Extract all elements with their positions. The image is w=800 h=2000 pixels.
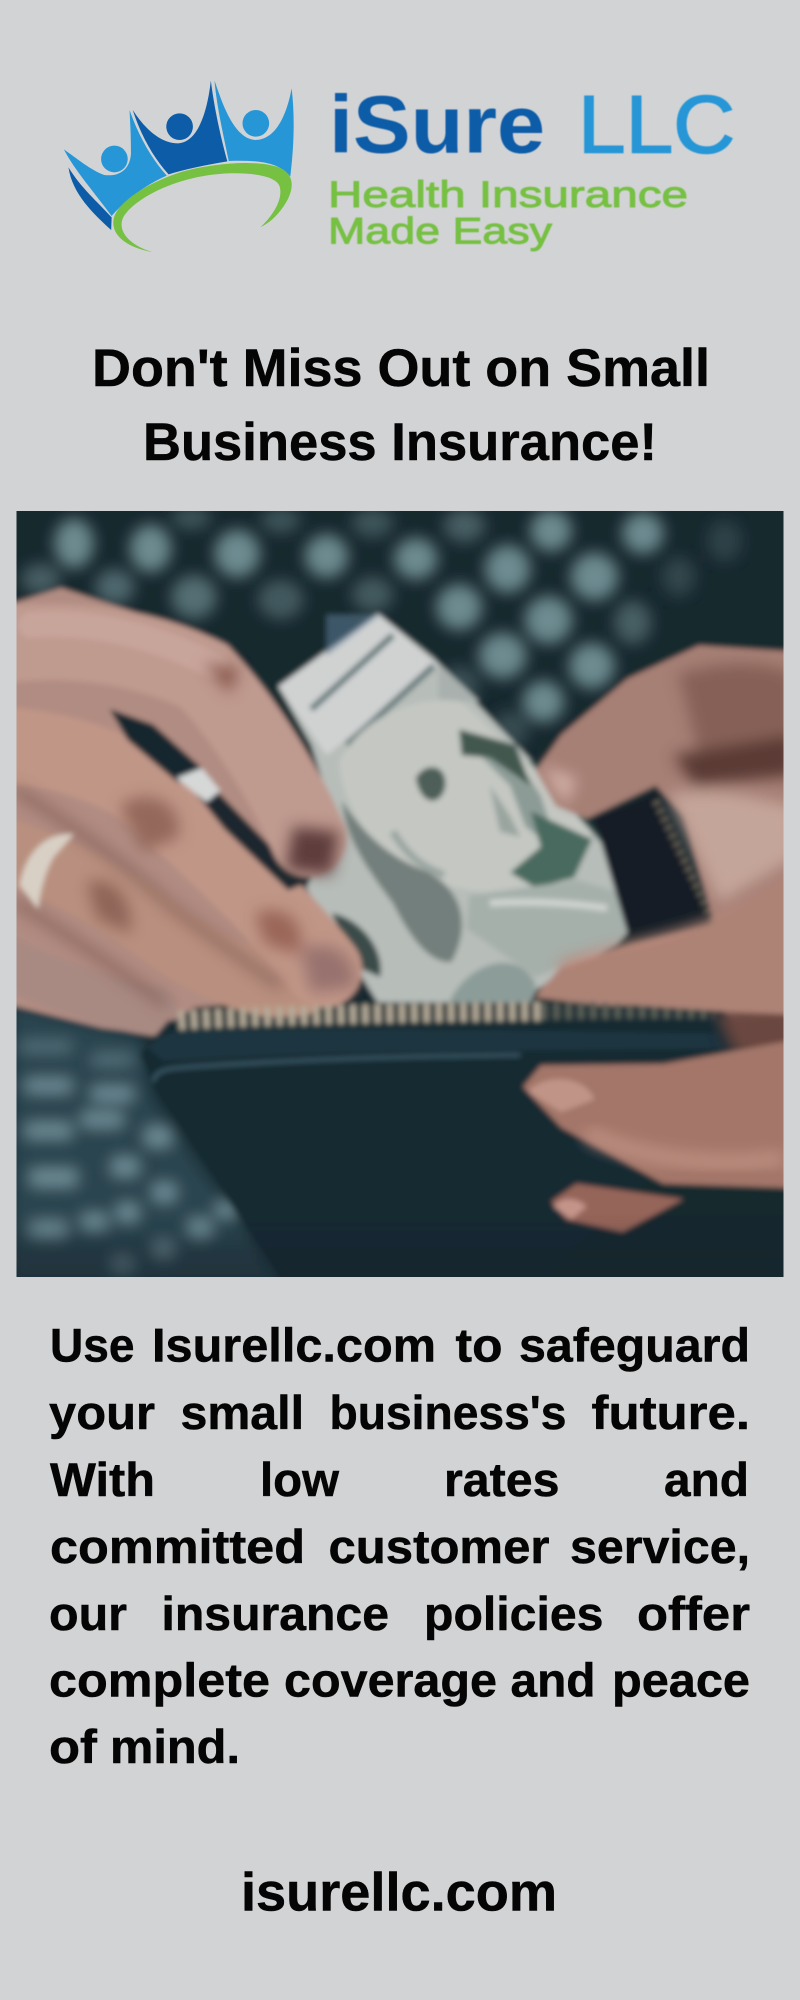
text block: body copy: low: [260, 1453, 339, 1506]
text block: body copy: our: [49, 1587, 127, 1640]
text block: body copy: service,: [570, 1520, 750, 1573]
polka dot fabric: [21, 507, 742, 748]
zipper: [179, 1011, 541, 1020]
text block: body copy: safeguard: [519, 1319, 750, 1372]
text block: body copy: peace: [612, 1654, 750, 1707]
text block: body copy: future.: [592, 1386, 750, 1439]
logo tagline: Made Easy: [328, 210, 553, 252]
wallet: [141, 998, 738, 1224]
text block: body copy: offer: [637, 1587, 750, 1640]
wallet zipper tab: [598, 796, 704, 937]
text block: body copy: and: [510, 1654, 596, 1707]
right hand: [534, 640, 784, 1020]
logo name: iSure: [329, 80, 545, 170]
text block: body copy: small: [180, 1386, 304, 1439]
title: Business Insurance!: [143, 413, 657, 472]
left hand: [0, 588, 355, 1035]
logo name: LLC: [578, 80, 735, 170]
text block: body copy: rates: [444, 1453, 560, 1506]
checked fabric, lower left: [16, 1008, 276, 1277]
text block: body copy: [49, 1319, 750, 1773]
logo tagline: [328, 174, 688, 252]
text block: body copy: coverage: [284, 1654, 497, 1707]
text block: body copy: insurance: [162, 1587, 389, 1640]
ring: [19, 834, 74, 909]
text block: body copy: and: [664, 1453, 749, 1506]
logo: iSure LLC: [64, 80, 735, 252]
rolled dollar bill: [278, 613, 656, 1003]
text block: body copy: to: [456, 1319, 502, 1372]
logo tagline: Health Insurance: [328, 174, 688, 215]
thumb of right hand over zipper: [534, 894, 784, 1018]
text block: body copy: complete: [49, 1654, 270, 1707]
text block: body copy: mind.: [110, 1720, 240, 1773]
text block: body copy: Isurellc.com: [152, 1319, 436, 1372]
title: [92, 339, 710, 472]
website url: isurellc.com: [241, 1863, 557, 1923]
photo: hands putting a rolled dollar bill into a wallet: [0, 500, 800, 1300]
text block: body copy: committed: [50, 1520, 305, 1573]
lower fingers of right hand: [523, 1000, 800, 1232]
text block: body copy: your: [49, 1386, 155, 1439]
knuckles and fingertips: [17, 663, 355, 1003]
text block: body copy: business's: [330, 1386, 566, 1439]
text block: body copy: customer: [328, 1520, 550, 1573]
title: Don't Miss Out on Small: [92, 339, 710, 398]
bottom shading: [16, 1225, 628, 1277]
text block: body copy: Use: [50, 1319, 134, 1372]
text block: body copy: With: [50, 1453, 155, 1506]
icon: crown of people: [64, 81, 294, 252]
text block: body copy: policies: [424, 1587, 604, 1640]
text block: body copy: of: [49, 1720, 97, 1773]
logo name: [329, 80, 735, 170]
